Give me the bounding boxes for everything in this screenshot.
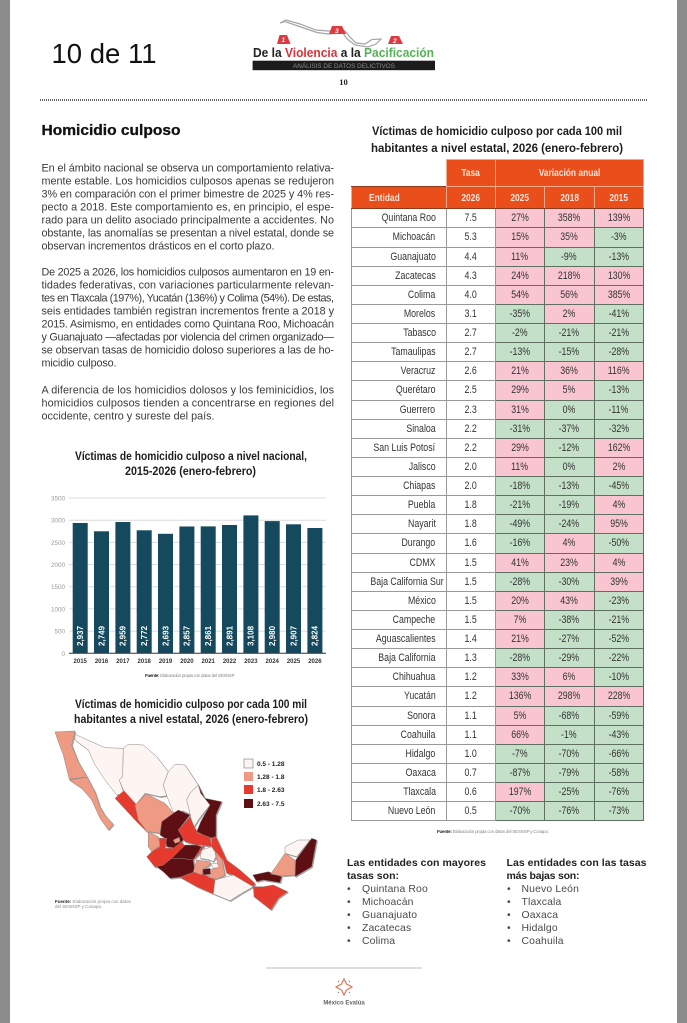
table: tasas por entidad: -13%: [510, 346, 530, 358]
map title: habitantes a nivel estatal, 2026 (enero-febrero): [74, 712, 308, 726]
body text: De 2025 a 2026, los homicidios culposos aumentaron en 19 en-: [42, 267, 334, 279]
table: tasas por entidad: -70%: [559, 748, 580, 760]
table: tasas por entidad: -21%: [608, 327, 629, 339]
body text: seis entidades también registran incrementos frente a 2018 y: [42, 306, 335, 318]
bar chart: víctimas a nivel nacional: 2016: [95, 659, 109, 665]
table: tasas por entidad: 29%: [511, 384, 529, 396]
table: tasas por entidad: -59%: [608, 710, 629, 722]
list: mayores tasas: Zacatecas: [362, 923, 411, 934]
table: tasas por entidad: 21%: [511, 633, 529, 645]
table: tasas por entidad: 2.0: [465, 461, 477, 473]
bar chart: víctimas a nivel nacional: 500: [54, 629, 65, 636]
table: tasas por entidad: 11%: [512, 251, 528, 263]
table: tasas por entidad: 1.0: [465, 748, 477, 760]
chart title: nacional: [75, 449, 307, 478]
table: tasas por entidad: -23%: [608, 595, 629, 607]
bar chart: víctimas a nivel nacional: 2,857: [183, 625, 192, 646]
table: tasas por entidad: -35%: [510, 308, 530, 320]
table: tasas por entidad: 1.5: [465, 557, 477, 569]
table: tasas por entidad: 95%: [610, 518, 628, 530]
table: tasas por entidad: 39%: [610, 576, 628, 588]
table: tasas por entidad: 0.5: [465, 805, 477, 817]
body text: micidio culposo.: [42, 358, 116, 370]
table: tasas por entidad: 298%: [558, 690, 580, 702]
map legend: 1.8 - 2.63: [257, 787, 285, 794]
logo: México Evalúa: México Evalúa: [323, 1001, 365, 1007]
list: mayores tasas: Las entidades con mayores: [347, 857, 486, 869]
list: mayores tasas: •: [347, 910, 351, 921]
table: tasas por entidad: Tamaulipas: [391, 346, 436, 358]
table: tasas por entidad: -9%: [561, 251, 577, 263]
table: tasas por entidad: 2.2: [465, 423, 477, 435]
table: tasas por entidad: 162%: [607, 442, 630, 454]
bar chart: víctimas a nivel nacional: 2025: [287, 659, 301, 665]
table: tasas por entidad: -21%: [510, 499, 530, 511]
bar chart: víctimas a nivel nacional: 2,891: [225, 625, 234, 646]
bar chart: víctimas a nivel nacional: 2024: [266, 659, 280, 665]
table: tasas por entidad: 0%: [563, 461, 576, 473]
table: tasas por entidad: 5%: [514, 710, 526, 722]
list: tasas más bajas: Tlaxcala: [522, 897, 561, 908]
table: tasas por entidad: 1.5: [465, 614, 477, 626]
table: tasas por entidad: 2018: [560, 192, 579, 204]
table: tasas por entidad: Michoacán: [393, 231, 436, 243]
list: tasas más bajas: Coahuila: [522, 936, 564, 947]
table: tasas por entidad: 3.1: [465, 308, 477, 320]
body text: obstante, las anomalías se presentan a nivel estatal, donde se: [42, 228, 334, 240]
table: tasas por entidad: 7.5: [465, 212, 477, 224]
table: tasas por entidad: Puebla: [408, 499, 436, 511]
bar chart: víctimas a nivel nacional: 2020: [180, 659, 194, 665]
table: tasas por entidad: -18%: [510, 480, 530, 492]
table: tasas por entidad: -37%: [559, 423, 580, 435]
table: tasas por entidad: -12%: [559, 442, 580, 454]
table: tasas por entidad: Tabasco: [403, 327, 436, 339]
table: tasas por entidad: Tlaxcala: [403, 786, 436, 798]
table: tasas por entidad: 130%: [607, 270, 630, 282]
list: tasas más bajas: Nuevo León: [522, 884, 579, 895]
bar chart: víctimas a nivel nacional: 0: [61, 651, 65, 658]
table: tasas por entidad: 1.5: [465, 576, 477, 588]
logo: De la Violencia a la Pacificación: 1: [282, 37, 286, 44]
table: tasas por entidad: San Luis Potosí: [374, 442, 436, 454]
table: tasas por entidad: -7%: [512, 748, 528, 760]
table: tasas por entidad: 2.2: [465, 442, 477, 454]
table: tasas por entidad: 0%: [563, 404, 576, 416]
table: tasas por entidad: -1%: [561, 729, 577, 741]
list: mayores tasas: •: [347, 897, 351, 908]
table: tasas por entidad: 6%: [563, 671, 576, 683]
bar chart: víctimas a nivel nacional: 2021: [202, 659, 216, 665]
table: tasas por entidad: -87%: [510, 767, 530, 779]
table: tasas por entidad: 5.3: [465, 231, 477, 243]
table: tasas por entidad: -79%: [559, 767, 580, 779]
table: tasas por entidad: 136%: [509, 690, 531, 702]
body text: En el ámbito nacional se observa un comportamiento relativa-: [42, 163, 334, 175]
table: tasas por entidad: 7%: [514, 614, 526, 626]
table: tasas por entidad: 4.3: [465, 270, 477, 282]
table: tasas por entidad: Colima: [408, 289, 436, 301]
map title: Víctimas de homicidio culposo por cada 100 mil: [75, 697, 307, 711]
table: tasas por entidad: -21%: [559, 327, 580, 339]
table: tasas por entidad: 228%: [607, 690, 630, 702]
table: tasas por entidad: -28%: [510, 576, 530, 588]
list: mayores tasas: •: [347, 923, 351, 934]
bar chart: víctimas a nivel nacional: 2,824: [311, 625, 320, 646]
table: tasas por entidad: 2%: [563, 308, 576, 320]
table: tasas por entidad: 33%: [511, 671, 529, 683]
table: tasas por entidad: -11%: [609, 404, 629, 416]
table: tasas por entidad: Sinaloa: [406, 423, 436, 435]
table: tasas por entidad: 66%: [511, 729, 529, 741]
table: tasas por entidad: 4%: [563, 537, 576, 549]
table: tasas por entidad: 1.5: [465, 595, 477, 607]
table: tasas por entidad: 2.3: [465, 404, 477, 416]
table: tasas por entidad: 5%: [563, 384, 576, 396]
list: tasas más bajas: •: [507, 923, 511, 934]
bar chart: víctimas a nivel nacional: 2022: [223, 659, 237, 665]
table: tasas por entidad: -29%: [559, 652, 580, 664]
table: tasas por entidad: -25%: [559, 786, 580, 798]
table: tasas por entidad: 11%: [512, 461, 528, 473]
bar chart: víctimas a nivel nacional: 2018: [138, 659, 152, 665]
table title: habitantes a nivel estatal, 2026 (enero-febrero): [371, 141, 623, 155]
table: tasas por entidad: 358%: [558, 212, 580, 224]
chart source: Fuente: Elaboración propia con datos del SESNSP.: [145, 673, 235, 678]
table: tasas por entidad: 31%: [511, 404, 529, 416]
table: tasas por entidad: 1.3: [465, 652, 477, 664]
table: tasas por entidad: -66%: [608, 748, 629, 760]
logo: México Evalúa: [323, 979, 365, 1007]
list: tasas más bajas: Oaxaca: [522, 910, 558, 921]
table: tasas por entidad: -31%: [510, 423, 530, 435]
chart title: nacional: 2015-2026 (enero-febrero): [125, 464, 256, 478]
list: mayores tasas: Guanajuato: [362, 910, 417, 921]
table: tasas por entidad: 4%: [612, 499, 625, 511]
table: tasas por entidad: 2.7: [465, 327, 477, 339]
table: tasas por entidad: 116%: [608, 365, 630, 377]
body text: se observan tasas de homicidio doloso superiores a las de ho-: [42, 345, 334, 357]
table: tasas por entidad: Morelos: [404, 308, 436, 320]
table: tasas por entidad: -22%: [608, 652, 629, 664]
map title: [74, 697, 308, 726]
table: tasas por entidad: -13%: [559, 480, 580, 492]
table: tasas por entidad: 36%: [560, 365, 578, 377]
table: tasas por entidad: Variación anual: [539, 167, 600, 179]
body text: tes en Tlaxcala (197%), Yucatán (136%) y Colima (54%). De estas,: [42, 293, 334, 305]
bar chart: víctimas a nivel nacional: 2500: [51, 540, 65, 547]
table: tasas por entidad: 2.0: [465, 480, 477, 492]
list: mayores tasas: Michoacán: [362, 897, 414, 908]
logo: De la Violencia a la Pacificación: De la Violencia a la Pacificación: [253, 45, 434, 60]
table: tasas por entidad: 139%: [607, 212, 630, 224]
body text: occidente, centro y sureste del país.: [42, 411, 214, 423]
table: tasas por entidad: -70%: [510, 805, 530, 817]
table: tasas por entidad: Campeche: [393, 614, 436, 626]
body text: [42, 163, 335, 423]
table: tasas por entidad: Hidalgo: [406, 748, 436, 760]
table: tasas por entidad: [351, 159, 644, 821]
list: tasas más bajas: •: [507, 910, 511, 921]
table: tasas por entidad: -50%: [608, 537, 629, 549]
bar chart: víctimas a nivel nacional: 2,937: [76, 625, 85, 646]
table: tasas por entidad: México: [408, 595, 436, 607]
table: tasas por entidad: 20%: [511, 595, 529, 607]
bar chart: víctimas a nivel nacional: 2,907: [289, 625, 298, 646]
table: tasas por entidad: 35%: [560, 231, 578, 243]
bar chart: víctimas a nivel nacional: 2019: [159, 659, 173, 665]
bar chart: víctimas a nivel nacional: 2,749: [97, 625, 106, 646]
chart title: nacional: Víctimas de homicidio culposo a nivel nacional,: [75, 449, 307, 463]
map legend: 1.28 - 1.8: [257, 774, 285, 781]
table: tasas por entidad: 1.1: [465, 729, 477, 741]
body text: mente estable. Los homicidios culposos apenas se redujeron: [42, 176, 334, 188]
table: tasas por entidad: 218%: [558, 270, 580, 282]
table: tasas por entidad: -16%: [510, 537, 530, 549]
table: tasas por entidad: Sonora: [407, 710, 436, 722]
body text: rado para un delito asociado principalmente a accidentes. No: [42, 215, 334, 227]
table: tasas por entidad: Querétaro: [396, 384, 436, 396]
bar chart: víctimas a nivel nacional: 2017: [116, 659, 130, 665]
table: tasas por entidad: 1.1: [465, 710, 477, 722]
table: tasas por entidad: 54%: [511, 289, 529, 301]
list: mayores tasas: [347, 857, 486, 947]
bar chart: víctimas a nivel nacional: 2015: [74, 659, 88, 665]
table: tasas por entidad: -32%: [608, 423, 629, 435]
list: tasas más bajas: más bajas son:: [506, 870, 580, 882]
body text: homicidios culposos tienden a concentrarse en regiones del: [42, 398, 334, 410]
table: tasas por entidad: 29%: [511, 442, 529, 454]
table: tasas por entidad: 0.7: [465, 767, 477, 779]
table: tasas por entidad: -68%: [559, 710, 580, 722]
table: tasas por entidad: 4.0: [465, 289, 477, 301]
map source: [55, 899, 132, 909]
list: mayores tasas: Quintana Roo: [362, 884, 428, 895]
table: tasas por entidad: -30%: [559, 576, 580, 588]
table: tasas por entidad: 2%: [612, 461, 625, 473]
body text: y Guanajuato —afectadas por violencia del crimen organizado—: [42, 332, 334, 344]
list: mayores tasas: •: [347, 936, 351, 947]
table: tasas por entidad: 56%: [560, 289, 578, 301]
table: tasas por entidad: 41%: [511, 557, 529, 569]
table: tasas por entidad: 2025: [511, 192, 529, 204]
table: tasas por entidad: Nuevo León: [388, 805, 436, 817]
list: tasas más bajas: •: [507, 884, 511, 895]
table: tasas por entidad: Guerrero: [400, 404, 436, 416]
table: tasas por entidad: 4.4: [465, 251, 477, 263]
map: tasas estatales: [55, 731, 317, 910]
table: tasas por entidad: Jalisco: [409, 461, 436, 473]
bar chart: víctimas a nivel nacional: 2026: [308, 659, 322, 665]
table: tasas por entidad: -28%: [608, 346, 629, 358]
bar chart: víctimas a nivel nacional: 2,980: [268, 625, 277, 646]
table: tasas por entidad: -76%: [608, 786, 629, 798]
table: tasas por entidad: -3%: [611, 231, 627, 243]
body text: pecto a 2018. Este comportamiento es, en principio, el espe-: [42, 202, 334, 214]
table title: [371, 124, 623, 155]
table: tasas por entidad: -24%: [559, 518, 580, 530]
table: tasas por entidad: 23%: [560, 557, 578, 569]
bar chart: víctimas a nivel nacional: 2,959: [119, 625, 128, 646]
table: tasas por entidad: 1.4: [465, 633, 477, 645]
bar chart: víctimas a nivel nacional: 2,693: [161, 625, 170, 646]
table: tasas por entidad: Veracruz: [401, 365, 436, 377]
table: tasas por entidad: -52%: [608, 633, 629, 645]
body text: tidades federativas, con variaciones particularmente relevan-: [42, 280, 334, 292]
table: tasas por entidad: Durango: [402, 537, 436, 549]
table: tasas por entidad: Nayarit: [408, 518, 436, 530]
body text: observan incrementos drásticos en el corto plazo.: [42, 241, 274, 253]
table: tasas por entidad: Chiapas: [403, 480, 436, 492]
table: tasas por entidad: 1.8: [465, 518, 477, 530]
table: tasas por entidad: Baja California Sur: [370, 576, 443, 588]
table: tasas por entidad: 2.5: [465, 384, 477, 396]
table: tasas por entidad: Quintana Roo: [381, 212, 436, 224]
logo: De la Violencia a la Pacificación: [253, 20, 435, 70]
bar chart: víctimas a nivel nacional: 2,772: [140, 625, 149, 646]
list: mayores tasas: tasas son:: [347, 870, 399, 882]
table: tasas por entidad: 4%: [612, 557, 625, 569]
table: tasas por entidad: 2.7: [465, 346, 477, 358]
table: tasas por entidad: -38%: [559, 614, 580, 626]
table: tasas por entidad: -76%: [559, 805, 580, 817]
table: tasas por entidad: -13%: [608, 251, 629, 263]
table: tasas por entidad: 197%: [509, 786, 531, 798]
table: tasas por entidad: -49%: [510, 518, 530, 530]
table: tasas por entidad: -2%: [512, 327, 528, 339]
table: tasas por entidad: -58%: [608, 767, 629, 779]
table: tasas por entidad: Aguascalientes: [376, 633, 436, 645]
table: tasas por entidad: 21%: [511, 365, 529, 377]
table: tasas por entidad: 1.6: [465, 537, 477, 549]
table: tasas por entidad: -13%: [608, 384, 629, 396]
bar chart: víctimas a nivel nacional: 3000: [51, 518, 65, 525]
table: tasas por entidad: 2.6: [465, 365, 477, 377]
body text: A diferencia de los homicidios dolosos y los feminicidios, los: [42, 385, 335, 397]
heading: Homicidio culposo: Homicidio culposo: [42, 122, 180, 139]
table: tasas por entidad: -28%: [510, 652, 530, 664]
table: tasas por entidad: -41%: [608, 308, 629, 320]
table: tasas por entidad: 15%: [511, 231, 529, 243]
table: tasas por entidad: -27%: [559, 633, 580, 645]
map legend: 0.5 - 1.28: [257, 761, 285, 768]
table: tasas por entidad: Zacatecas: [395, 270, 436, 282]
table: tasas por entidad: -73%: [608, 805, 629, 817]
bar chart: víctimas a nivel nacional: [51, 496, 326, 665]
table: tasas por entidad: Guanajuato: [390, 251, 436, 263]
table: tasas por entidad: 1.2: [465, 671, 477, 683]
body text: 3% en comparación con el primer bimestre de 2025 y 4% res-: [42, 189, 334, 201]
table: tasas por entidad: 1.2: [465, 690, 477, 702]
table: tasas por entidad: 2015: [609, 192, 628, 204]
table: tasas por entidad: 43%: [560, 595, 578, 607]
list: tasas más bajas: •: [507, 936, 511, 947]
map source: del SESNSP y Conapo.: [55, 904, 102, 909]
bar chart: víctimas a nivel nacional: 2000: [51, 562, 65, 569]
table: tasas por entidad: 24%: [511, 270, 529, 282]
table: tasas por entidad: Tasa: [461, 167, 480, 179]
logo: De la Violencia a la Pacificación: ANÁLISIS DE DATOS DELICTIVOS: [293, 63, 395, 70]
logo: De la Violencia a la Pacificación: 3: [335, 28, 339, 35]
table: tasas por entidad: CDMX: [410, 557, 436, 569]
page number: 10: [339, 77, 348, 87]
bar chart: víctimas a nivel nacional: 1500: [51, 584, 65, 591]
bar chart: víctimas a nivel nacional: 2,861: [204, 625, 213, 646]
bar chart: víctimas a nivel nacional: 3500: [51, 496, 65, 502]
table: tasas por entidad: 0.6: [465, 786, 477, 798]
table: tasas por entidad: Entidad: [368, 192, 399, 204]
table: tasas por entidad: -21%: [608, 614, 629, 626]
logo: De la Violencia a la Pacificación: 2: [392, 38, 397, 45]
bar chart: víctimas a nivel nacional: 1000: [51, 606, 65, 613]
table: tasas por entidad: -43%: [608, 729, 629, 741]
table: tasas por entidad: 2026: [461, 192, 480, 204]
table source: Fuente: Elaboración propia con datos del SESNSP y Conapo.: [437, 829, 549, 834]
map source: Fuente: Elaboración propia con datos: [55, 899, 132, 904]
table: tasas por entidad: Yucatán: [404, 690, 436, 702]
table: tasas por entidad: -19%: [559, 499, 580, 511]
list: tasas más bajas: Hidalgo: [522, 923, 558, 934]
table: tasas por entidad: -15%: [559, 346, 580, 358]
table: tasas por entidad: Coahuila: [401, 729, 436, 741]
table: tasas por entidad: -45%: [608, 480, 629, 492]
table: tasas por entidad: Chihuahua: [393, 671, 436, 683]
list: tasas más bajas: [506, 857, 647, 947]
list: mayores tasas: Colima: [362, 936, 395, 947]
table: tasas por entidad: 385%: [607, 289, 630, 301]
table: tasas por entidad: 27%: [511, 212, 529, 224]
body text: 2015. Asimismo, en entidades como Quintana Roo, Michoacán: [42, 319, 334, 331]
list: mayores tasas: •: [347, 884, 351, 895]
map legend: 2.63 - 7.5: [257, 801, 285, 808]
page counter: 10 de 11: [52, 38, 156, 69]
table: tasas por entidad: Baja California: [378, 652, 436, 664]
table: tasas por entidad: Oaxaca: [405, 767, 436, 779]
map legend: [244, 759, 285, 808]
list: tasas más bajas: Las entidades con las tasas: [506, 857, 647, 869]
table: tasas por entidad: 1.8: [465, 499, 477, 511]
table: tasas por entidad: -10%: [608, 671, 629, 683]
list: tasas más bajas: •: [507, 897, 511, 908]
table title: Víctimas de homicidio culposo por cada 100 mil: [372, 124, 622, 138]
bar chart: víctimas a nivel nacional: 2023: [244, 659, 258, 665]
bar chart: víctimas a nivel nacional: 3,108: [247, 625, 256, 646]
